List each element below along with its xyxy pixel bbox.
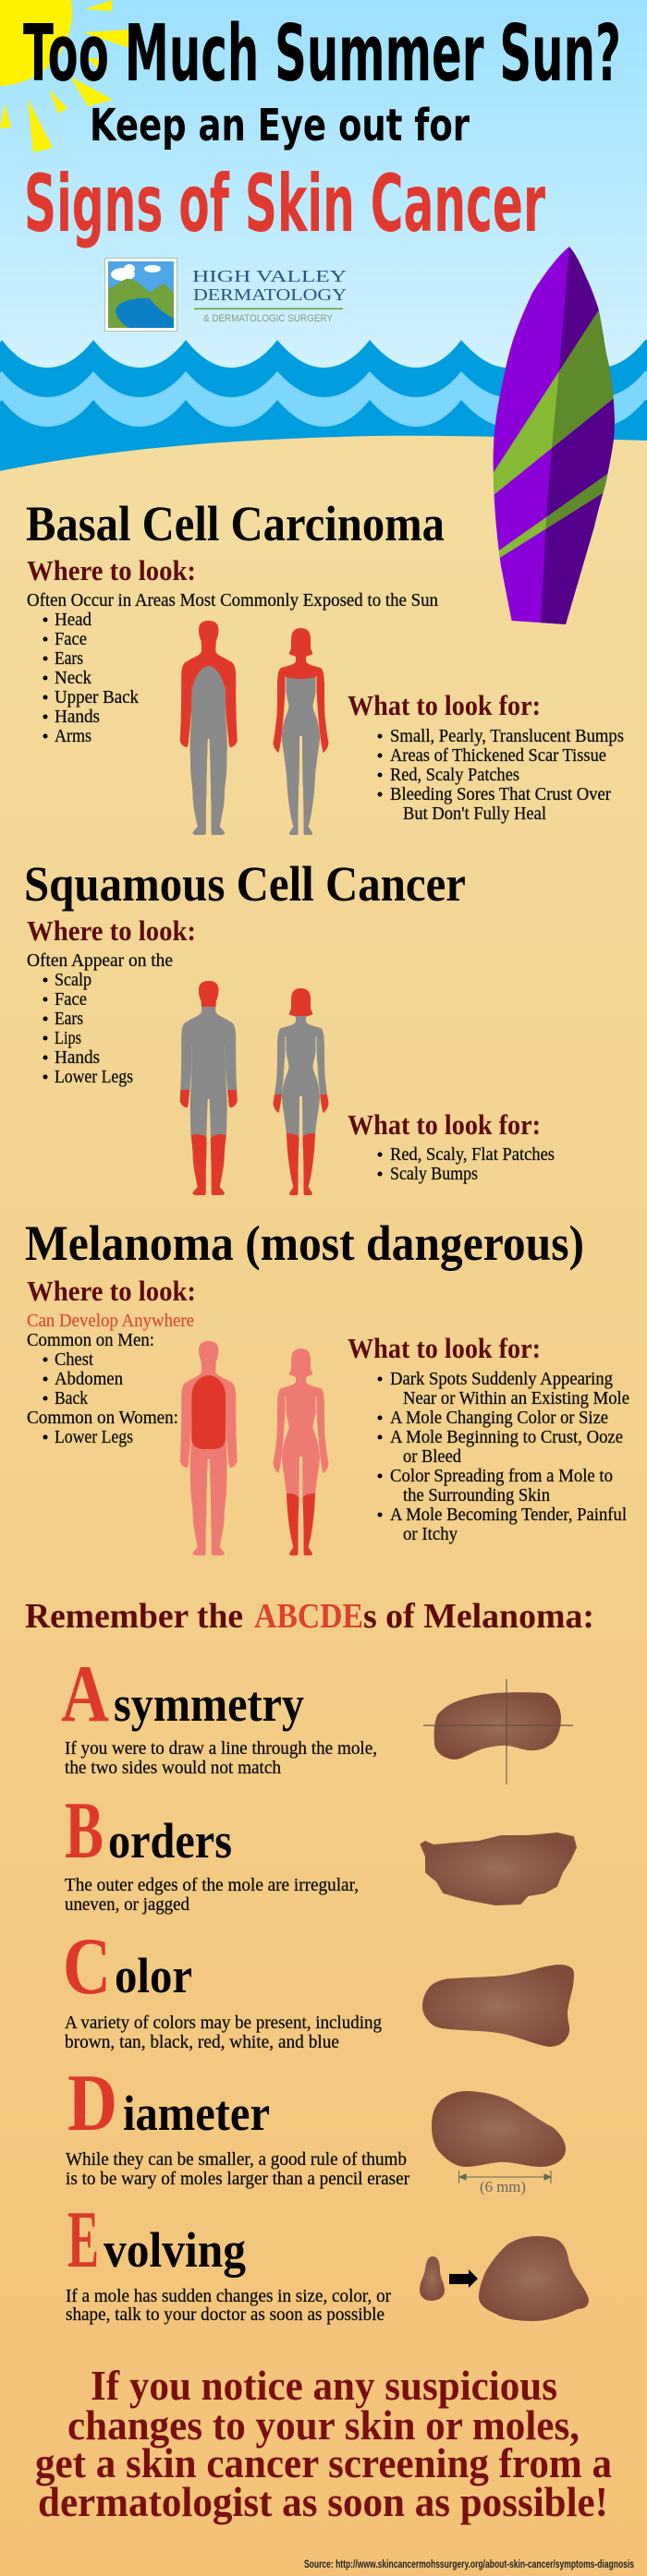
text: diameter description: While they can be smaller, a good rule of thumb (66, 2149, 407, 2170)
callout: get a screening: changes to your skin or moles, (67, 2401, 580, 2449)
text: where list: Scalp (55, 970, 92, 990)
text: what list: Bleeding Sores That Crust Over (390, 784, 611, 804)
heading: melanoma: Melanoma (most dangerous) (25, 1215, 584, 1271)
text: diameter description (66, 2149, 409, 2189)
text: color description (65, 2013, 382, 2052)
heading: ABCDEs: Remember the (25, 1597, 243, 1636)
text: what list (377, 1369, 629, 1544)
icon: sun (0, 0, 129, 152)
heading: where to look: Where to look: (27, 554, 196, 587)
icon: 6 mm measure (458, 2171, 551, 2195)
icon: asymmetric mole (423, 1679, 573, 1784)
text: borders description: The outer edges of the mole are irregular, (65, 1875, 359, 1895)
heading: evolving (67, 2195, 246, 2285)
text: what list: or Bleed (403, 1446, 461, 1467)
heading: where to look: Where to look: (27, 914, 196, 947)
text: evolving description (66, 2286, 391, 2325)
text: where list: Chest (55, 1349, 93, 1370)
text: evolving description: shape, talk to your doctor as soon as possible (66, 2304, 385, 2325)
logo: High Valley Dermatology (105, 259, 347, 331)
heading: diameter (67, 2059, 270, 2148)
heading: what to look for: What to look for: (348, 1108, 541, 1141)
heading: asymmetry (61, 1650, 304, 1739)
text: what list: A Mole Changing Color or Size (390, 1408, 608, 1428)
text: where list: Head (55, 610, 92, 630)
icon: surfboard (494, 247, 615, 624)
heading: evolving: E (67, 2195, 99, 2285)
heading: diameter: D (67, 2059, 117, 2148)
text: where list (27, 950, 173, 1087)
text: borders description (65, 1875, 359, 1915)
panel: borders (65, 1786, 576, 1915)
text: what list: A Mole Beginning to Crust, Ooze (390, 1427, 623, 1447)
text: where list: Neck (55, 668, 92, 688)
icon: 6 mm measure: (6 mm) (480, 2178, 526, 2195)
text: where list: Arms (55, 726, 92, 746)
callout: get a screening: get a skin cancer screening from a (35, 2439, 612, 2486)
callout: get a screening (35, 2362, 612, 2525)
beach (0, 436, 647, 554)
text: where list: Ears (55, 648, 83, 669)
background: sky (0, 0, 647, 480)
text: where list: Lips (55, 1028, 81, 1048)
icon: arrow (449, 2269, 478, 2288)
text: where list: Ears (55, 1009, 83, 1029)
heading: diameter: iameter (123, 2086, 270, 2141)
callout: get a screening: If you notice any suspicious (91, 2362, 557, 2409)
text: what list: A Mole Becoming Tender, Painful (390, 1505, 627, 1525)
text: where list (27, 1311, 194, 1447)
text: color description: brown, tan, black, red, white, and blue (65, 2032, 339, 2052)
text: what list: Dark Spots Suddenly Appearing (390, 1369, 613, 1389)
text: what list: But Don't Fully Heal (403, 804, 546, 824)
heading: ABCDEs: ABCDE (254, 1597, 363, 1636)
text: where list: Abdomen (55, 1369, 123, 1389)
heading: squamous: Squamous Cell Cancer (24, 856, 466, 912)
panel: color (63, 1922, 574, 2052)
heading: evolving: volving (104, 2222, 246, 2278)
text: where list: Back (55, 1388, 88, 1409)
logo: High Valley Dermatology: HIGH VALLEY (192, 267, 347, 285)
heading: color: olor (115, 1948, 192, 2003)
title (23, 8, 621, 250)
callout: get a screening: dermatologist as soon as possible! (38, 2478, 608, 2525)
panel: evolving (66, 2195, 589, 2325)
text: where list: Face (55, 989, 87, 1010)
text: where list: Face (55, 629, 87, 649)
heading: borders (65, 1786, 232, 1876)
icon: large mole (432, 2091, 566, 2167)
panel: melanoma (25, 1215, 629, 1555)
text: what list (377, 726, 624, 824)
heading: ABCDEs: s of Melanoma: (363, 1597, 594, 1636)
text: what list: Color Spreading from a Mole to (390, 1466, 613, 1486)
panel: asymmetry (61, 1650, 573, 1784)
heading: borders: B (65, 1786, 104, 1876)
icon: man figure (180, 1341, 238, 1555)
text: where list: Hands (55, 707, 100, 727)
text: what list: Near or Within an Existing Mole (403, 1388, 629, 1409)
panel: squamous cell cancer (24, 856, 555, 1195)
icon: woman figure (274, 628, 329, 835)
heading: asymmetry: symmetry (114, 1676, 304, 1732)
text: color description: A variety of colors may be present, including (65, 2013, 382, 2033)
waves (0, 340, 647, 480)
text: borders description: uneven, or jagged (65, 1894, 189, 1915)
text: where list: Upper Back (55, 687, 139, 707)
text: where list: Common on Men: (27, 1330, 154, 1350)
panel: basal cell carcinoma (26, 496, 624, 835)
heading: asymmetry: A (61, 1650, 109, 1739)
text: where list: Often Appear on the (27, 950, 173, 971)
text: asymmetry description (65, 1738, 377, 1778)
icon: woman figure (274, 1348, 329, 1555)
icon: evolved mole (479, 2236, 589, 2321)
heading: borders: orders (108, 1813, 232, 1869)
heading: what to look for: What to look for: (348, 689, 541, 721)
text: evolving description: If a mole has sudden changes in size, color, or (66, 2286, 391, 2306)
text: asymmetry description: the two sides would not match (65, 1758, 281, 1778)
text: where list: Hands (55, 1047, 100, 1068)
heading: ABCDEs (25, 1597, 594, 1636)
text: what list: or Itchy (403, 1524, 458, 1544)
title: Keep an Eye out for (90, 100, 470, 151)
text: where list: Often Occur in Areas Most Commonly Exposed to the Sun (27, 590, 438, 611)
icon: colored mole (422, 1965, 574, 2047)
icon: man figure (180, 621, 238, 835)
heading: basal: Basal Cell Carcinoma (26, 496, 445, 551)
icon: irregular mole (421, 1833, 576, 1905)
text: diameter description: is to be wary of moles larger than a pencil eraser (66, 2169, 409, 2189)
icon: woman figure (274, 988, 329, 1195)
text: what list: Red, Scaly Patches (390, 765, 519, 785)
heading: what to look for: What to look for: (348, 1332, 541, 1364)
text: where list: Common on Women: (27, 1408, 178, 1428)
heading: color (63, 1922, 192, 2012)
text: where list: Lower Legs (55, 1427, 133, 1447)
icon: man figure (180, 981, 238, 1195)
text: asymmetry description: If you were to draw a line through the mole, (65, 1738, 377, 1759)
text: what list: Small, Pearly, Translucent Bumps (390, 726, 624, 746)
text: what list: the Surrounding Skin (403, 1485, 550, 1506)
heading: where to look: Where to look: (27, 1275, 196, 1307)
text: what list: Red, Scaly, Flat Patches (390, 1144, 555, 1165)
text: where list (27, 590, 438, 746)
panel: diameter (66, 2059, 566, 2195)
heading: color: C (63, 1922, 111, 2012)
text: what list (377, 1144, 555, 1184)
logo: High Valley Dermatology: DERMATOLOGY (193, 285, 347, 304)
text: where list: Lower Legs (55, 1067, 133, 1087)
logo: High Valley Dermatology: & DERMATOLOGIC SURGERY (203, 313, 334, 324)
text: what list: Areas of Thickened Scar Tissue (390, 745, 606, 766)
icon: small mole (420, 2256, 445, 2301)
text: what list: Scaly Bumps (390, 1164, 478, 1184)
text: where list: Can Develop Anywhere (27, 1311, 194, 1331)
